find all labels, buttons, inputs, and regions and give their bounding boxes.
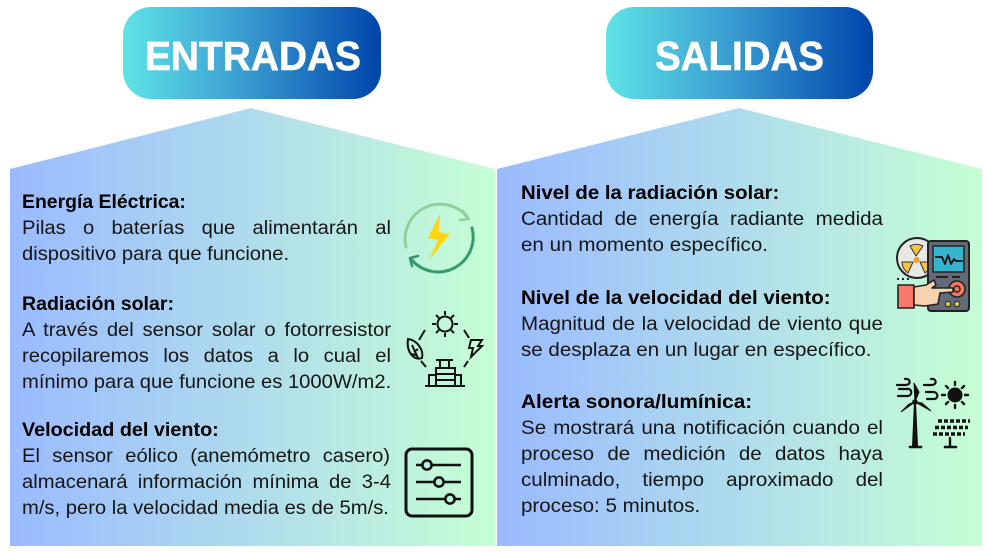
text block: nivel de velocidad del viento — [521, 286, 889, 364]
text block: radiación solar: A través del sensor solar o fotorresistor — [22, 320, 391, 341]
icon: radiation meter — [897, 238, 969, 311]
icon: sun, leaf, bolt and buildings — [408, 311, 482, 386]
heading pill: ENTRADAS — [123, 7, 381, 99]
icon: wind turbine, sun and solar panel — [897, 379, 970, 447]
text block: alerta sonora/lumínica: proceso de medición de datos haya — [521, 444, 883, 465]
text block: nivel de velocidad del viento: Magnitud de la velocidad de viento que — [521, 314, 883, 335]
text block: radiación solar — [22, 292, 397, 396]
text block: alerta sonora/lumínica: Se mostrará una notificación cuando el — [521, 418, 883, 439]
text block: velocidad del viento: Velocidad del viento: — [22, 420, 219, 441]
text block: velocidad del viento: almacenará información mínima de 3-4 — [22, 472, 391, 493]
panel: entradas — [10, 7, 495, 546]
panel: salidas — [497, 7, 982, 546]
heading pill: ENTRADAS: ENTRADAS — [145, 33, 361, 79]
text block: nivel de radiación solar: en un momento específico. — [521, 235, 768, 256]
text block: nivel de velocidad del viento: se desplaza en un lugar en específico. — [521, 340, 871, 361]
text block: energía eléctrica: dispositivo para que funcione. — [22, 244, 289, 265]
text block: radiación solar: recopilaremos los datos a lo cual el — [22, 346, 391, 367]
text block: alerta sonora/lumínica: proceso: 5 minutos. — [521, 496, 700, 517]
text block: energía eléctrica: Pilas o baterías que alimentarán al — [22, 218, 391, 239]
text block: energía eléctrica — [22, 190, 397, 268]
text block: alerta sonora/lumínica — [521, 390, 889, 520]
text block: nivel de radiación solar — [521, 181, 889, 259]
heading pill: SALIDAS — [606, 7, 873, 99]
text block: nivel de velocidad del viento: Nivel de la velocidad del viento: — [521, 288, 831, 309]
text block: velocidad del viento — [22, 418, 397, 522]
text block: alerta sonora/lumínica: Alerta sonora/lumínica: — [521, 392, 752, 413]
text block: velocidad del viento: El sensor eólico (anemómetro casero) — [22, 446, 390, 467]
icon: energy cycle — [405, 204, 473, 272]
text block: radiación solar: mínimo para que funcione es 1000W/m2. — [22, 372, 391, 393]
text block: radiación solar: Radiación solar: — [22, 294, 174, 315]
text block: energía eléctrica: Energía Eléctrica: — [22, 192, 186, 213]
icon: sliders — [406, 449, 472, 516]
text block: nivel de radiación solar: Nivel de la radiación solar: — [521, 183, 779, 204]
heading pill: SALIDAS: SALIDAS — [655, 33, 824, 79]
text block: velocidad del viento: m/s, pero la velocidad media es de 5m/s. — [22, 498, 389, 519]
text block: alerta sonora/lumínica: culminado, tiempo aproximado del — [521, 470, 883, 491]
text block: nivel de radiación solar: Cantidad de energía radiante medida — [521, 209, 883, 230]
